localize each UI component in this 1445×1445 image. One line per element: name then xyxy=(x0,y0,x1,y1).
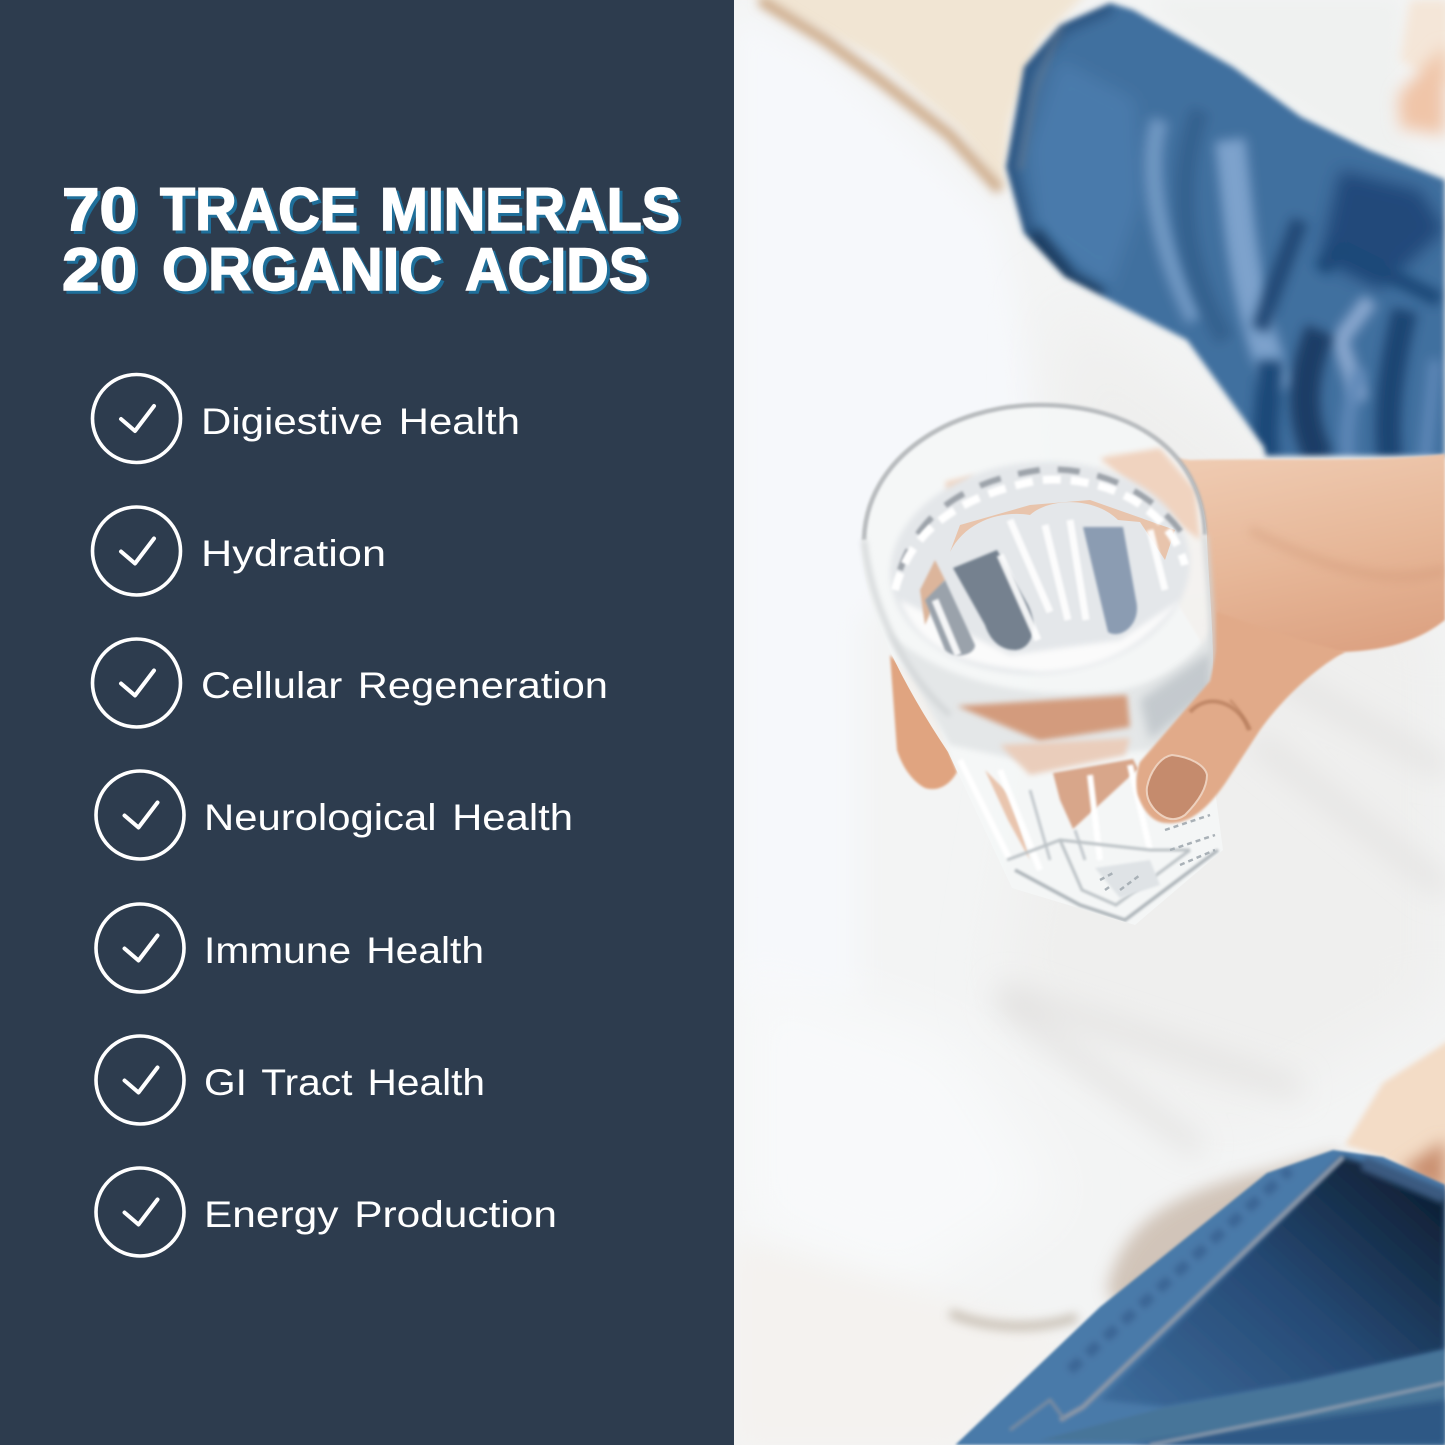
title text: ORGANIC xyxy=(162,236,442,303)
icon: check circle xyxy=(92,639,180,727)
item: Neurological Health xyxy=(96,771,573,859)
photo: denim jeans xyxy=(950,1140,1445,1445)
glass: hand through base xyxy=(1053,759,1138,829)
glass: water surface xyxy=(890,462,1190,674)
title shadow: ACIDS xyxy=(468,239,651,306)
title shadow xyxy=(65,179,683,306)
item: Hydration xyxy=(92,507,386,595)
icon: check circle xyxy=(96,771,184,859)
photo: glass of water xyxy=(862,403,1223,925)
label: Cellular Regeneration xyxy=(201,665,608,706)
glass: hand through water xyxy=(957,695,1130,741)
icon: check circle xyxy=(96,1036,184,1124)
item: Immune Health xyxy=(96,904,484,992)
photo: skin lower right xyxy=(1345,1040,1445,1195)
label: Energy Production xyxy=(204,1194,557,1235)
item: Energy Production xyxy=(96,1168,557,1256)
label: Digiestive Health xyxy=(201,401,520,442)
glass: skin seen through the rim xyxy=(945,448,1200,540)
title xyxy=(62,176,683,306)
photo: fingers behind the glass xyxy=(890,655,957,789)
item: GI Tract Health xyxy=(96,1036,485,1124)
photo background: white bedding xyxy=(734,0,1445,1445)
glass: pale band below water xyxy=(900,638,1210,757)
title shadow: 20 xyxy=(65,239,140,306)
panel: navy background xyxy=(0,0,734,1445)
photo: denim sleeve xyxy=(1000,0,1445,460)
photo: thumb in front of glass xyxy=(1136,530,1445,823)
photo: thumbnail xyxy=(1147,755,1207,819)
title text: TRACE xyxy=(160,176,358,243)
item: Cellular Regeneration xyxy=(92,639,608,727)
jeans: dark inner panel xyxy=(1100,1157,1445,1407)
item: Digiestive Health xyxy=(92,374,520,462)
title text: MINERALS xyxy=(380,176,680,243)
jeans: lower fold xyxy=(1040,1350,1445,1445)
label: Immune Health xyxy=(204,930,484,971)
title shadow: 70 xyxy=(65,179,140,246)
label: Hydration xyxy=(201,533,386,574)
icon: check circle xyxy=(96,904,184,992)
photo: skin top edge xyxy=(745,0,1090,190)
photo: hand xyxy=(1179,452,1445,672)
title shadow: MINERALS xyxy=(383,179,683,246)
photo: blurred knee top right xyxy=(1398,0,1445,135)
icon: check circle xyxy=(92,374,180,462)
jeans: seams xyxy=(1060,1157,1343,1420)
glass: skin refraction arcs xyxy=(950,500,1175,560)
title shadow: TRACE xyxy=(163,179,361,246)
label: GI Tract Health xyxy=(204,1062,485,1103)
glass: dark facets in water xyxy=(953,550,1033,650)
title text: 20 xyxy=(62,236,137,303)
title text xyxy=(62,176,680,303)
photo: hand holding a glass of water on white bedding xyxy=(734,0,1445,1445)
icon: check circle xyxy=(92,507,180,595)
benefit list xyxy=(92,374,608,1256)
title text: 70 xyxy=(62,176,137,243)
title shadow: ORGANIC xyxy=(165,239,445,306)
glass: rim highlight xyxy=(864,405,1205,540)
label: Neurological Health xyxy=(204,797,573,838)
glass: waves at water rim xyxy=(900,469,1190,570)
icon: check circle xyxy=(96,1168,184,1256)
title text: ACIDS xyxy=(465,236,648,303)
glass: base facets xyxy=(960,760,1150,870)
